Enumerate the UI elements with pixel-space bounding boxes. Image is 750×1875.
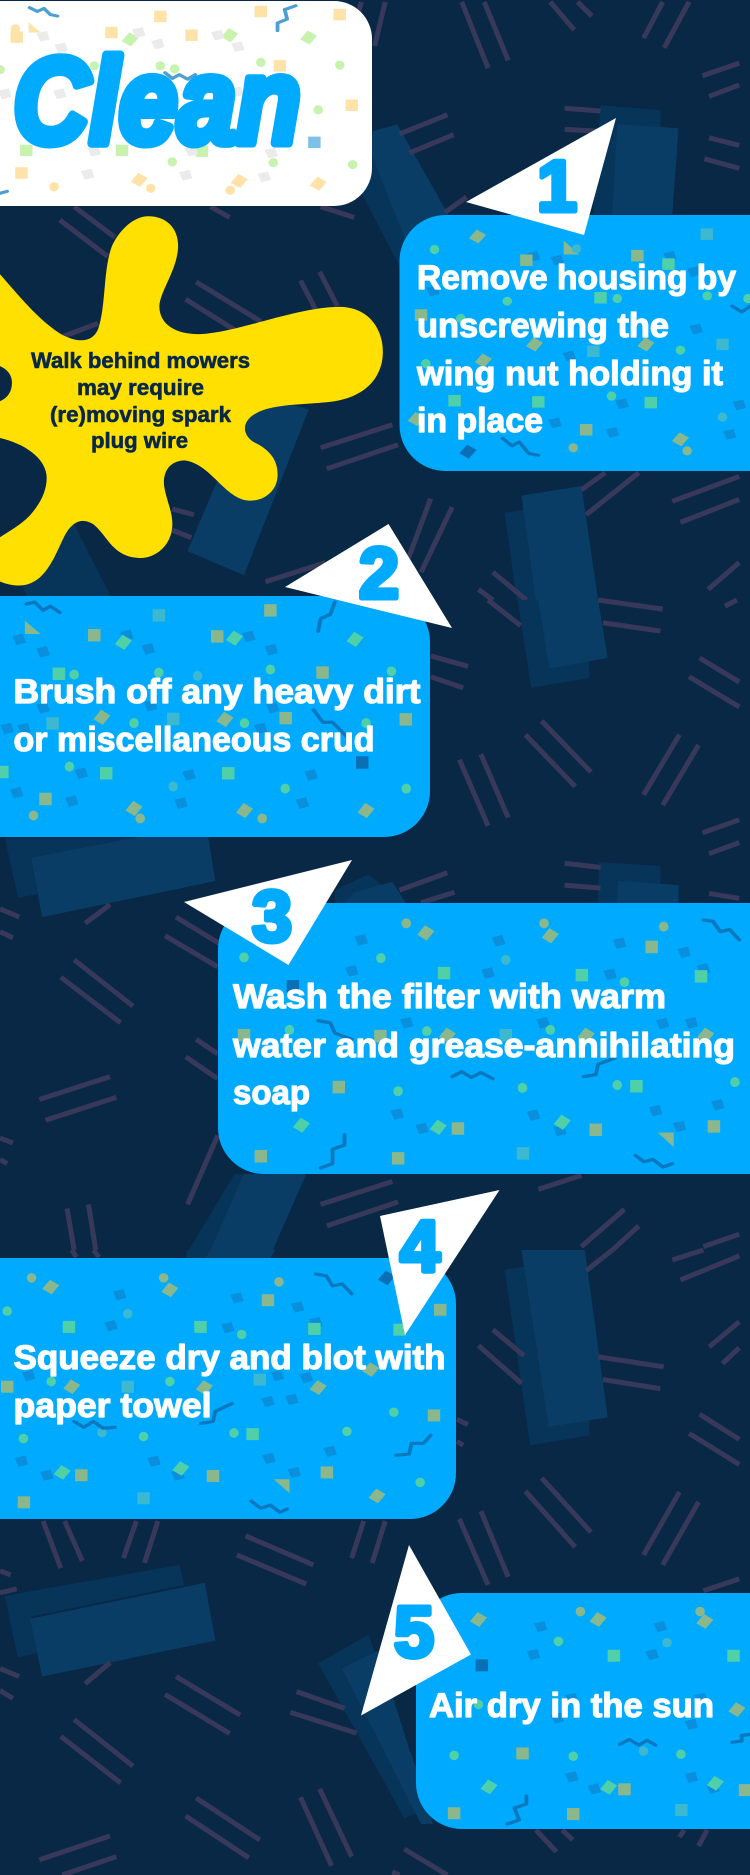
arrow: number 2 — [285, 524, 452, 628]
step 2 text: or miscellaneous crud — [14, 721, 374, 759]
panel: title — [0, 1, 372, 206]
arrow: number 3 — [184, 860, 352, 965]
callout text: may require — [77, 375, 204, 400]
arrow: number 3: 3 — [252, 877, 292, 957]
step 3 text: soap — [233, 1074, 310, 1112]
arrow: number 4: 4 — [400, 1207, 440, 1287]
callout text: (re)moving spark — [50, 402, 232, 427]
panel: step 4 — [0, 1258, 456, 1519]
step 1 text: in place — [417, 402, 543, 440]
step 1 text: unscrewing the — [417, 307, 669, 345]
panel: step 3 — [218, 903, 750, 1174]
background pattern: top section — [0, 2, 739, 600]
step 2 text: Brush off any heavy dirt — [14, 673, 420, 711]
step 3 text: Wash the filter with warm — [233, 978, 666, 1016]
arrow: number 5: 5 — [394, 1593, 434, 1673]
callout text: Walk behind mowers — [31, 348, 250, 373]
step 1 text: Remove housing by — [417, 259, 736, 297]
arrow: number 2: 2 — [359, 534, 399, 614]
callout text: plug wire — [91, 428, 188, 453]
step 3 text — [232, 978, 735, 1112]
step 4 text: paper towel — [14, 1387, 212, 1425]
panel: step 1 — [400, 215, 750, 471]
step 4 text — [14, 1339, 445, 1425]
panel: step 5 — [416, 1593, 750, 1829]
arrow: number 1 — [466, 118, 616, 235]
title text: Clean — [13, 33, 301, 169]
step 1 text — [416, 259, 736, 440]
background pattern: lower section — [0, 1250, 739, 1875]
arrow: number 5 — [361, 1545, 471, 1716]
callout: yellow splat — [0, 216, 383, 586]
step 2 text — [14, 673, 420, 759]
panel: step 2 — [0, 596, 430, 837]
step 1 text: wing nut holding it — [416, 355, 723, 393]
arrow: number 1: 1 — [537, 147, 577, 227]
step 4 text: Squeeze dry and blot with — [14, 1339, 445, 1377]
step 3 text: water and grease-annihilating — [232, 1027, 735, 1065]
arrow: number 4 — [380, 1190, 500, 1335]
background pattern: middle section — [0, 600, 739, 1250]
callout text — [31, 348, 250, 453]
step 5 text: Air dry in the sun — [429, 1687, 714, 1725]
